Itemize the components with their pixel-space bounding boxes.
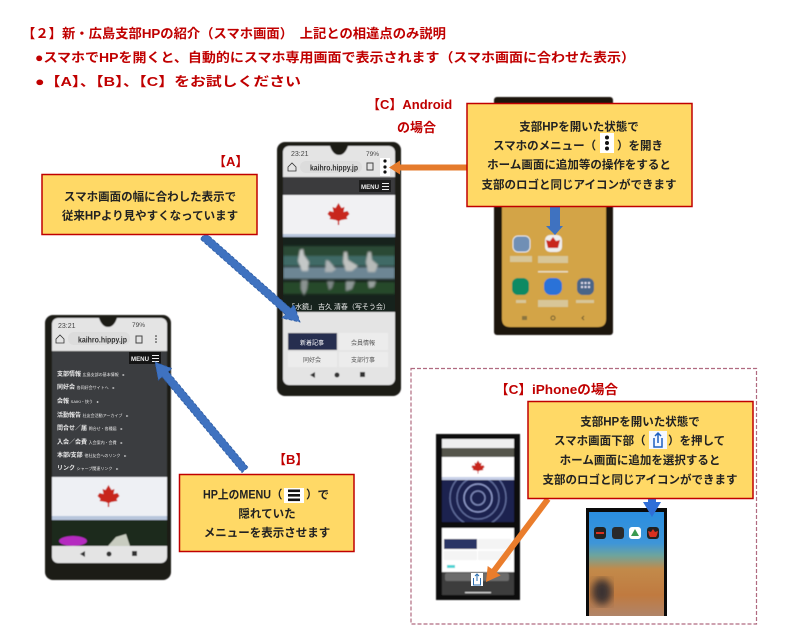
text: bullet line 1: ●スマホでHPを開くと、自動的にスマホ専用画面で表示されます（スマホ画面に合わせた表示）	[35, 50, 635, 65]
label: C Android: の場合	[397, 120, 436, 135]
label: C Android	[367, 97, 452, 135]
callout: C iPhone	[528, 402, 753, 498]
phone B: menu open: 活動報告 社友会活動アーカイブ ▸	[57, 411, 128, 419]
label: C iPhone: 【C】iPhoneの場合	[495, 382, 618, 397]
heading: section title: 【２】新・広島支部HPの紹介（スマホ画面） 上記との相違点のみ説明	[22, 26, 446, 41]
phone A: site top page: kaihro.hippy.jp	[310, 164, 358, 172]
phone: iPhone home screen	[586, 508, 667, 616]
callout: B: （	[271, 488, 282, 502]
callout: C iPhone: 支部のロゴと同じアイコンができます	[543, 472, 737, 486]
arrow: B callout to menu button	[155, 362, 248, 473]
phone A: site top page: 「水鏡」 吉久 清春（写そう会）	[288, 302, 390, 311]
arrow: iPhone callout to new icon	[643, 498, 661, 517]
callout: C Android: スマホのメニュー（	[493, 138, 596, 152]
phone A: site top page: 79%	[366, 151, 379, 158]
phone A: site top page: 支部行事	[351, 356, 375, 364]
arrow: Android callout to new icon	[546, 205, 563, 235]
phone B: menu open	[45, 315, 171, 580]
arrow: Android callout to three-dot menu	[389, 160, 468, 174]
phone A: site top page: 新着記事	[300, 339, 324, 347]
arrow: iPhone callout to share button	[486, 497, 550, 582]
callout: C Android: ）を開き	[617, 138, 663, 152]
phone A: site top page: 会員情報	[351, 339, 375, 347]
arrow: A callout to phone	[200, 233, 300, 322]
panel: iPhone dashed frame	[411, 368, 756, 624]
phone B: menu open: 入会／会費 入会案内・会費 ▸	[57, 438, 123, 446]
callout: C Android: ホーム画面に追加等の操作をすると	[487, 158, 671, 172]
phone A: site top page: 同好会	[303, 356, 321, 364]
phone B: menu open: kaihro.hippy.jp	[78, 336, 127, 344]
callout: B: メニューを表示させます	[204, 526, 330, 540]
phone B: menu open: 問合せ／届 問合せ・各種届 ▸	[57, 424, 123, 432]
callout: A: スマホ画面の幅に合わした表示で	[64, 190, 236, 204]
callout: C iPhone: 支部HPを開いた状態で	[580, 414, 700, 428]
phone A: site top page	[277, 142, 401, 396]
callout: A: 従来HPより見やすくなっています	[62, 208, 238, 222]
callout: B: 隠れていた	[238, 508, 296, 520]
callout: C iPhone: ホーム画面に追加を選択すると	[560, 453, 720, 467]
phone B: menu open: 同好会 各同好会サイトへ ▸	[57, 383, 115, 391]
callout: C iPhone: スマホ画面下部（	[554, 434, 646, 448]
phone B: menu open: リンク シャープ関連リンク ▸	[57, 464, 118, 472]
callout: B: HP上のMENU	[203, 488, 271, 502]
label: C Android: 【C】Android	[367, 97, 452, 112]
phone B: menu open: 23:21	[58, 323, 76, 330]
phone B: menu open: 79%	[132, 322, 145, 329]
callout: C Android: 支部のロゴと同じアイコンができます	[482, 178, 676, 192]
phone B: menu open: 会報 SAIKI・快う ▸	[57, 397, 99, 405]
callout: C Android	[467, 104, 692, 206]
phone A: site top page: 23:21	[291, 151, 309, 158]
label: A: 【A】	[213, 154, 248, 169]
label: B: 【B】	[273, 452, 308, 467]
phone B: menu open: 本部/支部 他社友会へのリンク ▸	[57, 451, 126, 459]
callout: C Android: 支部HPを開いた状態で	[519, 120, 639, 134]
text: bullet line 2: ●【A】、【B】、【C】をお試しください	[35, 74, 301, 89]
phone A: site top page: MENU	[361, 184, 379, 191]
phone B: menu open: MENU	[131, 356, 149, 363]
callout: B: ）で	[306, 488, 329, 502]
phone B: menu open: 支部情報 広島支部の基本情報 ▸	[57, 370, 125, 378]
phone: Android home screen	[494, 97, 613, 335]
callout: B	[180, 474, 354, 552]
phone: iPhone browser	[436, 434, 520, 600]
callout: A	[42, 174, 257, 234]
callout: C iPhone: ）を押して	[668, 434, 725, 448]
